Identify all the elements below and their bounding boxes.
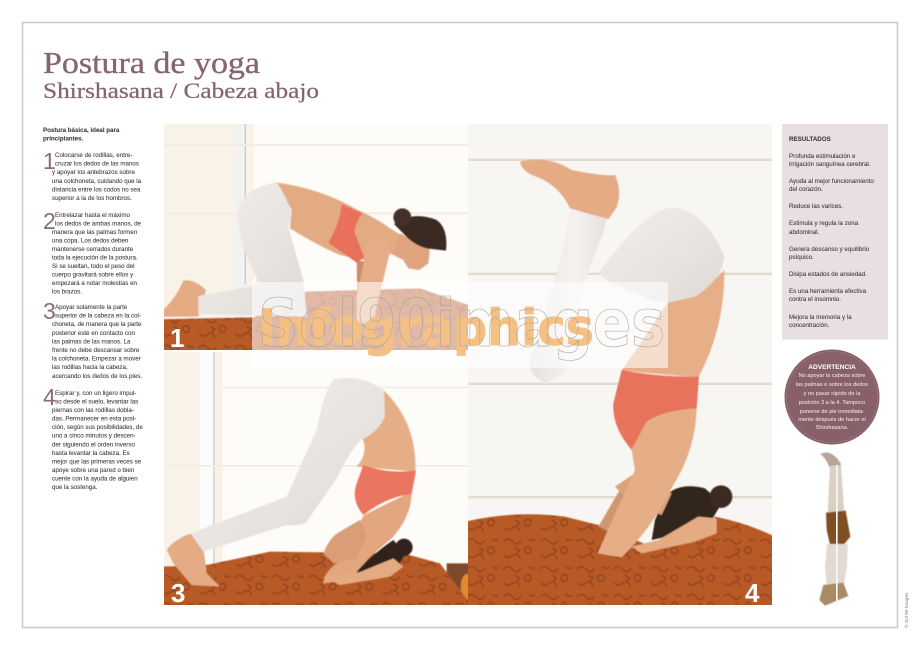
number 3: 3 [171,578,185,608]
warning text: mente después de hacer el [798,417,866,423]
step 3 number: 3 [43,298,56,324]
far forearm [598,487,635,533]
step 4 text: piernas con las rodillas dobla- [52,407,134,414]
step 2 text: mantenerse cerrados durante [52,246,134,253]
hair [394,216,446,251]
warning text: No apoyar la cabeza sobre [799,373,865,379]
photo 3: legs straight pose [160,350,474,610]
step 2 text: empezará a notar molestias en [52,280,138,287]
step 3 text: las palmas de las manos. La [52,338,131,345]
step 3 text: la colchoneta. Empezar a mover [52,356,141,363]
intro text: Postura básica, ideal para [43,127,120,134]
step 3 text: Apoyar solamente la parte [55,304,128,311]
leggings [191,378,385,552]
benefits list: Reduce las varices. [789,203,843,210]
step 3 text: choneta, de manera que la parte [52,321,142,328]
step 1 text: Colocarse de rodillas, entre- [55,152,132,159]
warning text: posición 3 a la 4. Tampoco [799,400,865,406]
step 4 text: que la sostenga. [52,484,98,491]
forearm [632,517,717,553]
step 2 text: los brazos. [52,289,82,296]
step 1 text: cruzar los dedos de las manos [55,161,139,168]
step 4 text: das. Permanecer en esta posi- [52,416,136,423]
torso [277,183,407,277]
blanket [160,288,473,353]
warning text: ponerse de pie inmediata- [800,409,864,415]
panel: resultados [782,124,888,340]
warning text: Shirshasana. [816,425,849,431]
benefits list: Genera descanso y equilibrio [789,246,870,253]
step 4 text: cuente con la ayuda de alguien [52,476,138,482]
warning text: las palmas o sobre los dedos [796,382,868,388]
step 2 text: una copa. Los dedos deben [52,238,129,245]
arms and base [819,583,848,606]
step 4 text: der siguiendo el orden inverso [52,441,135,448]
step 4 text: hasta levantar la cabeza. Es [52,450,130,457]
benefits list: Es una herramienta efectiva [789,288,867,295]
step 2 text: los dedos de ambas manos, de [55,221,142,228]
step 1 number: 1 [43,148,56,174]
blanket [465,514,778,610]
forearm [323,558,403,585]
step 4 text: mejor que las primeras veces se [52,458,142,465]
top [328,204,364,263]
step 2 text: toda la ejecución de la postura. [52,255,138,262]
foot [163,280,206,317]
panel heading: RESULTADOS [789,136,831,143]
step 2 number: 2 [43,208,56,234]
leggings [198,182,307,317]
step 3 text: las rodillas hacia la cabeza, [52,364,128,371]
benefits list: contra el insomnio. [789,296,841,303]
blanket [446,562,468,605]
step 3 text: frente no debe descansar sobre [52,347,140,354]
legs [828,465,844,513]
watermark outline text: Sol90images [258,285,665,362]
step 1 text: superior a la de los hombros. [52,195,132,202]
watermark text: Infographics [258,299,594,357]
torso [357,391,415,472]
arm and side [598,408,697,557]
benefits list: Mejora la memoria y la [789,314,852,321]
step 2 text: manera que las palmas formen [52,229,138,236]
hair [652,486,722,540]
benefits list: del corazón. [789,186,823,193]
top [355,465,416,515]
torso [825,544,848,587]
warning text: y no pasar rápido de la [804,391,861,397]
front arm [356,256,389,324]
benefits list: Disipa estados de ansiedad. [789,271,867,278]
photo 4: raised knees pose [465,120,778,610]
step 4 text: ción, según sus posibilidades, de [52,424,143,431]
watermark band [252,282,668,368]
foot [520,160,619,219]
step 1 text: una colchoneta, cuidando que la [52,178,142,185]
benefits list: Profunda estimulación e [789,153,856,160]
small anatomical figure [819,452,850,606]
benefits list: Estimula y regula la zona [789,220,859,227]
step 4 number: 4 [43,384,56,410]
lower leg [530,209,607,384]
instructions column [43,127,143,491]
number 1: 1 [170,323,184,353]
photo 1: kneeling pose [160,120,473,353]
hair [357,540,405,573]
photo credit: © Sol 90 Images [903,592,910,628]
feet [820,452,841,468]
warning circle [784,350,880,444]
benefits list: psíquico. [789,254,814,261]
step 3 text: acercando los dedos de los pies. [52,373,142,380]
torso [622,267,724,377]
benefits list: concentración. [789,322,830,329]
step 2 text: Entrelazar hasta el máximo [55,212,131,219]
top [613,370,699,450]
step 1 text: y apoyar los antebrazos sobre [52,169,135,176]
watermark text [258,285,665,362]
subtitle: Shirshasana / Cabeza abajo [43,78,319,103]
face [399,233,430,270]
head [323,520,367,563]
step 2 text: Si se sueltan, todo el peso del [52,263,135,270]
title: Postura de yoga [43,45,260,80]
step 4 text: apoye sobre una pared o bien [52,467,135,474]
benefits list: abdominal. [789,229,820,236]
intro text: principiantes. [43,136,84,142]
title [43,45,319,103]
step 4 text: so desde el suelo, levantar las [55,398,138,406]
step 3 text: posterior esté en contacto con [52,330,135,337]
step 4 text: uno a cinco minutos y descen- [52,433,136,440]
arm and side [323,492,412,583]
benefits list: Ayuda al mejor funcionamiento [789,178,874,185]
step 2 text: cuerpo gravitará sobre ellos y [52,272,134,279]
thigh [598,207,724,303]
step 3 text: superior de la cabeza en la col- [55,313,141,320]
back arm [357,260,373,297]
number 4: 4 [745,578,760,608]
step 1 text: distancia entre los codos no sea [52,186,141,193]
benefits list: irrigación sanguínea cerebral. [789,161,871,168]
step 4 text: Espirar y, con un ligero impul- [55,390,136,397]
foot [167,533,220,587]
warning heading: ADVERTENCIA [808,364,856,371]
face [615,473,672,515]
shorts [826,511,850,545]
